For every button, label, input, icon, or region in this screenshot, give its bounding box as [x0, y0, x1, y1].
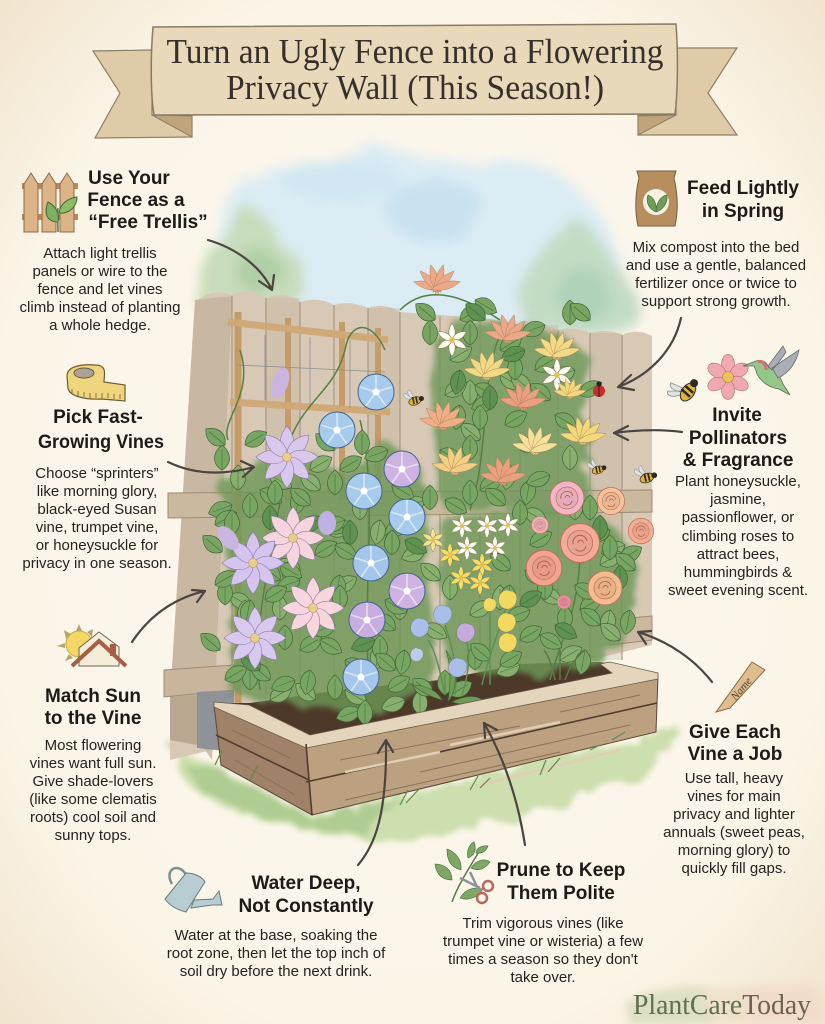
arrow: prune: [484, 723, 525, 845]
heading: feed lightly: [687, 178, 799, 222]
body: invite pollinators: Plant honeysuckle,: [675, 473, 801, 490]
heading: give each vine a job: Vine a Job: [688, 744, 782, 765]
body: match sun: roots) cool soil and: [30, 809, 156, 826]
heading: invite pollinators: Invite: [712, 405, 762, 426]
body: prune: trumpet vine or wisteria) a few: [443, 933, 643, 950]
heading: use your fence: [87, 168, 208, 233]
heading: prune: Them Polite: [507, 883, 615, 904]
arrow: use your fence: [208, 240, 274, 290]
clematis flowers: [213, 365, 344, 669]
heading: prune: [497, 860, 625, 904]
body: feed lightly: [626, 239, 806, 310]
icon: sprig and scissors: [435, 842, 493, 903]
wooden fence: [164, 291, 652, 760]
body: invite pollinators: climbing roses to: [682, 528, 794, 545]
heading: give each vine a job: [688, 722, 782, 765]
body: match sun: sunny tops.: [55, 827, 131, 844]
background trees: [195, 210, 637, 335]
icon: plant label: Name: [728, 675, 755, 704]
body: pick vines: privacy in one season.: [22, 555, 172, 572]
tip: pick vines: [22, 365, 172, 572]
heading: pick vines: Pick Fast-: [53, 407, 143, 428]
body: give each vine a job: annuals (sweet peas,: [663, 824, 805, 841]
heading: invite pollinators: & Fragrance: [683, 450, 793, 471]
body: give each vine a job: [663, 770, 805, 877]
tip: invite pollinators: [663, 346, 808, 599]
icon: sun and house: [57, 624, 126, 666]
raised garden bed: [214, 662, 658, 815]
logo: PlantCareToday: PlantCareToday: [633, 990, 812, 1021]
body: use your fence: a whole hedge.: [49, 317, 151, 334]
body: give each vine a job: privacy and lighter: [673, 806, 795, 823]
heading: use your fence: Use Your: [88, 168, 170, 189]
jasmine: [421, 513, 520, 595]
body: match sun: Most flowering: [45, 737, 141, 754]
body: match sun: [29, 737, 157, 844]
heading: prune: Prune to Keep: [497, 860, 625, 881]
body: feed lightly: fertilizer once or twice to: [635, 275, 797, 292]
body: feed lightly: support strong growth.: [641, 293, 791, 310]
logo: PlantCareToday: [625, 984, 825, 1024]
heading: pick vines: Growing Vines: [38, 432, 164, 453]
body: water deep: soil dry before the next drink.: [180, 963, 372, 980]
icon: tape measure: [67, 365, 125, 401]
arrow: feed lightly: [618, 318, 681, 390]
heading: use your fence: Fence as a: [87, 190, 185, 211]
body: pick vines: like morning glory,: [37, 483, 157, 500]
tip: give each vine a job: [663, 662, 805, 877]
tip: match sun: [29, 624, 157, 844]
body: water deep: root zone, then let the top inch of: [167, 945, 386, 962]
heading: water deep: Not Constantly: [238, 896, 374, 917]
tip: prune: [435, 842, 643, 986]
heading: match sun: Match Sun: [45, 686, 141, 707]
foliage mass: [222, 320, 636, 715]
sweet peas: [410, 590, 517, 704]
body: match sun: Give shade-lovers: [33, 773, 153, 790]
body: water deep: [167, 927, 386, 980]
icon: bee, flower and hummingbird: [663, 346, 799, 410]
insects on fence: [404, 382, 657, 485]
body: invite pollinators: passionflower, or: [682, 509, 794, 526]
sky wash: [217, 146, 616, 330]
body: use your fence: climb instead of planting: [20, 299, 180, 316]
body: use your fence: [20, 245, 180, 334]
body: use your fence: panels or wire to the: [32, 263, 168, 280]
body: feed lightly: and use a gentle, balanced: [626, 257, 806, 274]
body: match sun: (like some clematis: [29, 791, 157, 808]
arrow: invite pollinators: [614, 426, 682, 440]
honeysuckle: [413, 264, 607, 487]
icon: fence with sprout: [22, 173, 78, 232]
garden illustration: [164, 146, 676, 839]
body: use your fence: Attach light trellis: [43, 245, 157, 262]
heading: feed lightly: in Spring: [702, 201, 784, 222]
heading: match sun: [45, 686, 141, 729]
icon: watering can: [165, 868, 222, 912]
body: feed lightly: Mix compost into the bed: [633, 239, 799, 256]
body: invite pollinators: sweet evening scent.: [668, 582, 808, 599]
heading: water deep: [238, 873, 374, 917]
body: water deep: Water at the base, soaking the: [175, 927, 377, 944]
leaves: [226, 341, 628, 716]
body: prune: [443, 915, 643, 986]
heading: invite pollinators: [683, 405, 793, 471]
body: give each vine a job: quickly fill gaps.: [681, 860, 787, 877]
body: prune: take over.: [510, 969, 576, 986]
body: use your fence: fence and let vines: [37, 281, 163, 298]
body: match sun: vines want full sun.: [30, 755, 156, 772]
tip: water deep: [165, 868, 386, 980]
heading: give each vine a job: Give Each: [689, 722, 781, 743]
body: pick vines: or honeysuckle for: [36, 537, 158, 554]
body: give each vine a job: Use tall, heavy: [685, 770, 784, 787]
heading: feed lightly: Feed Lightly: [687, 178, 799, 199]
body: invite pollinators: hummingbirds &: [684, 564, 792, 581]
title text: Privacy Wall (This Season!): [226, 68, 604, 107]
body: pick vines: vine, trumpet vine,: [36, 519, 158, 536]
arrow: give each vine a job: [638, 631, 712, 682]
heading: pick vines: [38, 407, 164, 453]
body: give each vine a job: morning glory) to: [678, 842, 790, 859]
body: give each vine a job: vines for main: [687, 788, 781, 805]
arrow: water deep: [358, 740, 393, 865]
body: pick vines: black-eyed Susan: [37, 501, 157, 518]
title banner: [93, 24, 737, 138]
roses: [526, 481, 654, 680]
body: prune: Trim vigorous vines (like: [462, 915, 624, 932]
heading: invite pollinators: Pollinators: [689, 428, 787, 449]
raised bed soil: [214, 662, 658, 741]
icon: fertilizer bag: [636, 171, 677, 226]
tip: feed lightly: [626, 171, 806, 310]
body: pick vines: [22, 465, 172, 572]
tip: use your fence: [20, 168, 208, 334]
body: invite pollinators: attract bees,: [697, 546, 779, 563]
vines: [227, 295, 580, 690]
heading: match sun: to the Vine: [45, 708, 141, 729]
trellis: [228, 312, 390, 705]
body: prune: times a season so they don't: [448, 951, 639, 968]
body: invite pollinators: jasmine,: [709, 491, 766, 508]
title text: [166, 32, 664, 107]
morning glories: [319, 374, 425, 695]
arrow: pick vines: [168, 461, 254, 477]
icon: plant label: [716, 662, 765, 712]
body: pick vines: Choose “sprinters”: [35, 465, 159, 482]
heading: water deep: Water Deep,: [251, 873, 361, 894]
body: invite pollinators: [668, 473, 808, 599]
grass wash: [172, 724, 676, 839]
title text: Turn an Ugly Fence into a Flowering: [166, 32, 664, 71]
arrow: match sun: [132, 590, 205, 642]
heading: use your fence: “Free Trellis”: [88, 212, 208, 233]
